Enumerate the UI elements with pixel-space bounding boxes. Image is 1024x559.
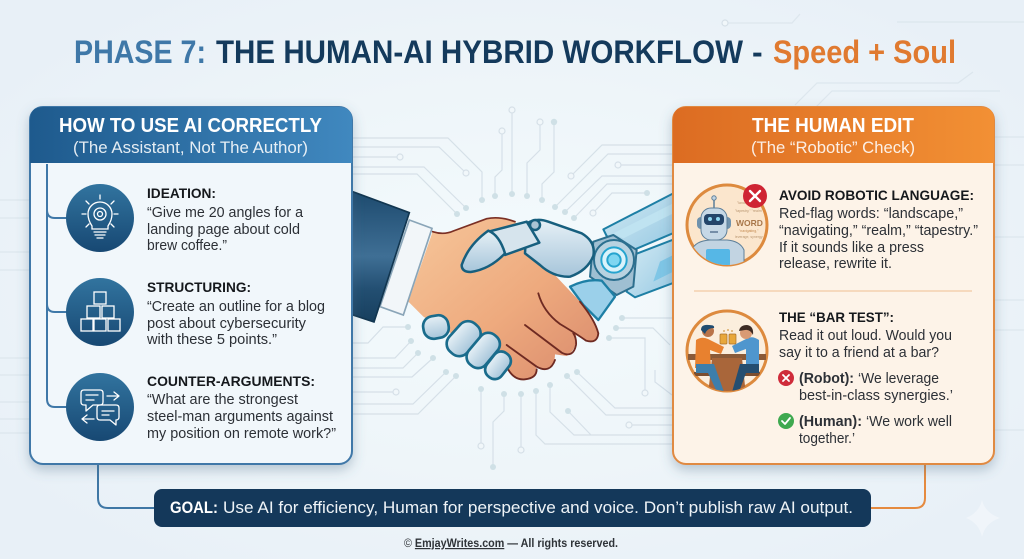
ideation text: IDEATION: [147,185,216,201]
icon: robot with word cloud: "landscape," [737,201,757,205]
handshake illustration [350,191,677,383]
structuring text: with these 5 points.” [146,332,277,348]
structuring text: STRUCTURING: [147,279,251,295]
icon: red cross [778,370,794,386]
timeline connector [47,164,70,407]
icon: two friends at a bar [687,311,767,395]
robot example: ‘We leverage [858,371,939,387]
avoid robotic language text: release, rewrite it. [779,256,892,272]
goal banner: Use AI for efficiency, Human for perspective and voice. Don’t publish raw AI output. [223,498,853,517]
icon: robot with word cloud: WORD [736,218,763,228]
human hand [408,218,598,379]
title: PHASE 7: [74,34,206,70]
counter-arguments text: my position on remote work?” [147,426,336,442]
bar test text: THE “BAR TEST”: [779,309,894,325]
title dash: - [752,34,763,70]
structuring text: “Create an outline for a blog [147,299,325,315]
icon: robot with word cloud: leverage, synergy [735,235,763,239]
connector: left panel to goal [98,460,156,508]
structuring text: post about cybersecurity [147,316,307,332]
avoid robotic language text: AVOID ROBOTIC LANGUAGE: [779,187,974,203]
icon: chat exchange [66,373,134,441]
counter-arguments text: “What are the strongest [147,392,298,408]
structuring text [146,279,325,348]
sparkle watermark [966,500,1000,537]
ideation text: “Give me 20 angles for a [147,205,304,221]
bar test text [779,309,952,361]
icon: block pyramid [66,278,134,346]
robot example: (Robot): [799,371,854,387]
icon: green check [778,413,794,429]
copyright footer: © EmjayWrites.com — All rights reserved. [404,536,618,550]
human example: together.’ [799,431,855,447]
title main: THE HUMAN-AI HYBRID WORKFLOW [216,34,744,70]
ideation text: landing page about cold [147,222,300,238]
robot fingers [421,314,514,383]
avoid robotic language text: “navigating,” “realm,” “tapestry.” [779,223,978,239]
icon: robot with word cloud: "navigating," [739,229,759,233]
heading: HOW TO USE AI CORRECTLY [59,115,323,137]
robot example: best-in-class synergies.’ [799,388,953,404]
goal banner [154,489,871,527]
icon: robot with word cloud: "tapestry," "realm" [735,209,764,213]
avoid robotic language text [779,187,978,272]
avoid robotic language text: If it sounds like a press [779,240,924,256]
subheading: (The “Robotic” Check) [751,138,915,157]
human example: ‘We work well [866,414,952,430]
robot forearm [570,192,677,320]
panel header [30,107,352,163]
icon: lightbulb [66,184,134,252]
panel: the human edit [673,107,994,464]
human example [799,414,952,447]
bar test text: say it to a friend at a bar? [779,345,939,361]
panel header [673,107,994,163]
counter-arguments text [147,373,336,442]
connector: right panel to goal [868,460,925,508]
icon: robot with word cloud [687,184,767,266]
robot example [799,371,953,404]
title accent: Speed + Soul [773,34,956,70]
ideation text: brew coffee.” [147,238,227,254]
subheading: (The Assistant, Not The Author) [73,138,308,157]
counter-arguments text: steel-man arguments against [147,409,333,425]
suit sleeve and cuff [350,191,432,322]
heading: THE HUMAN EDIT [752,115,914,137]
panel: how to use AI correctly [30,107,352,464]
bar test text: Read it out loud. Would you [779,328,952,344]
counter-arguments text: COUNTER-ARGUMENTS: [147,373,315,389]
ideation text [147,185,304,254]
avoid robotic language text: Red-flag words: “landscape,” [779,206,963,222]
human example: (Human): [799,414,862,430]
robot thumb and palm [462,220,594,277]
goal banner: GOAL: [170,498,218,517]
